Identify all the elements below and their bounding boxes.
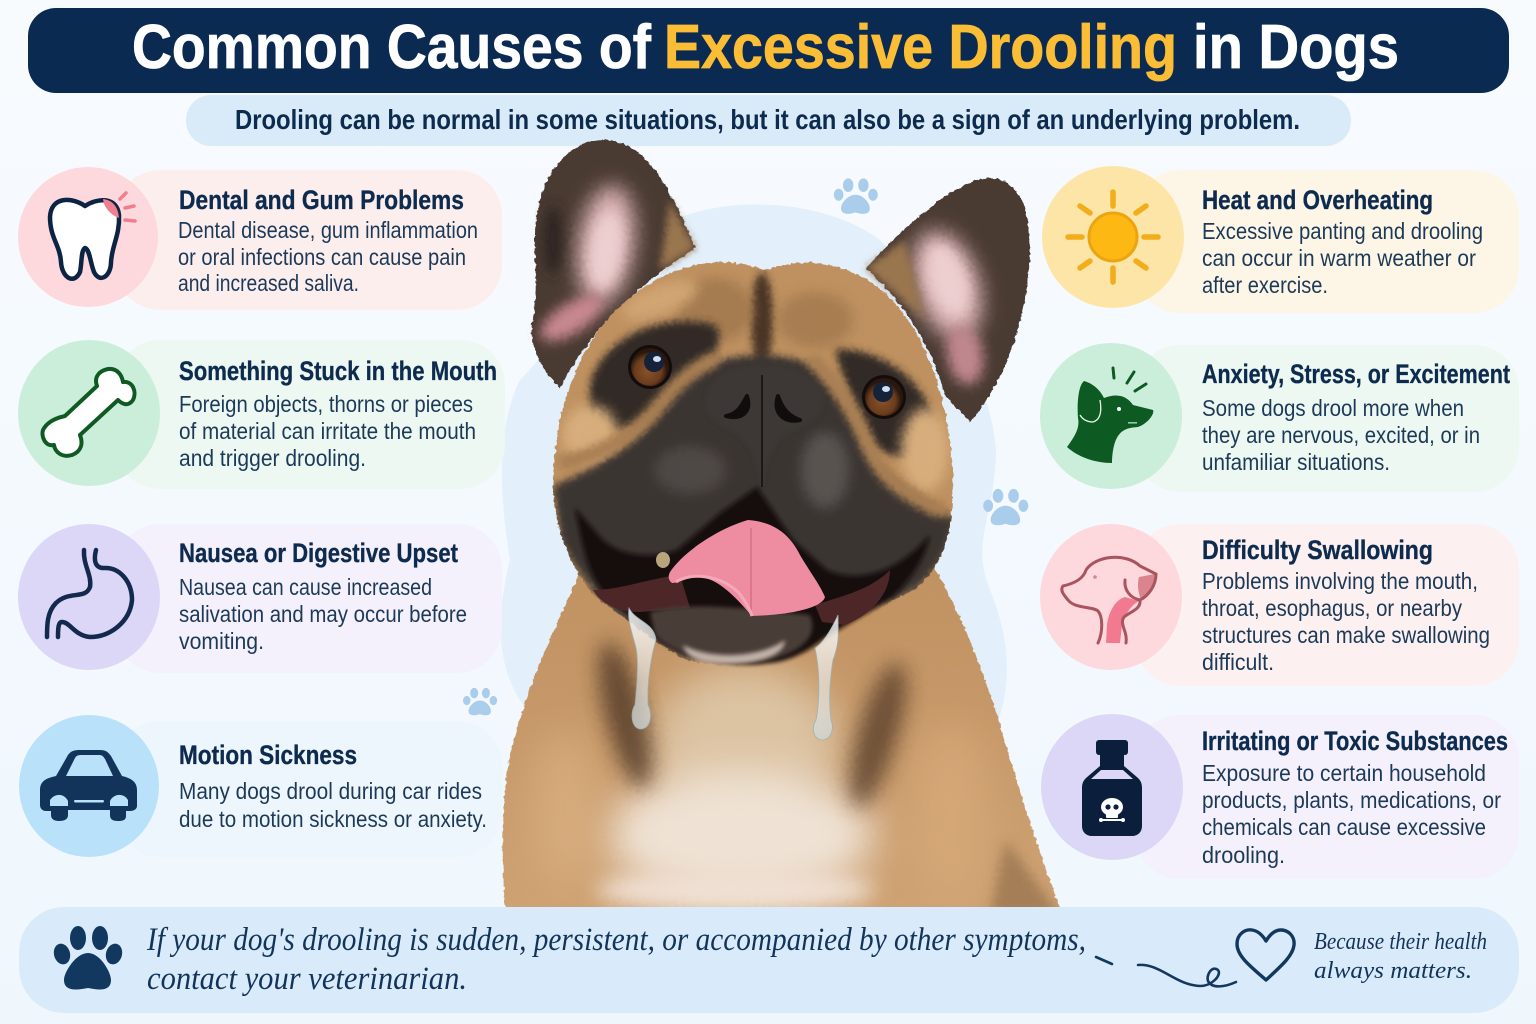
title text: highlight: Excessive Drooling xyxy=(664,13,1177,82)
dog illustration xyxy=(495,140,1075,930)
body text: Foreign objects, thorns or pieces xyxy=(179,391,473,417)
icon circle yellow xyxy=(1042,166,1184,308)
squiggle line xyxy=(1096,957,1236,986)
icon circle green xyxy=(1040,343,1182,489)
icon circle purple xyxy=(1041,714,1183,860)
heading: Something Stuck in the Mouth xyxy=(179,356,497,386)
body text: can occur in warm weather or xyxy=(1202,245,1476,271)
icon: bone xyxy=(42,369,135,456)
muzzle xyxy=(553,355,955,660)
body text: they are nervous, excited, or in xyxy=(1202,422,1480,448)
body text: Exposure to certain household xyxy=(1202,760,1486,786)
body text: Excessive panting and drooling xyxy=(1202,218,1483,244)
heading: Difficulty Swallowing xyxy=(1202,535,1433,565)
right ear xyxy=(866,178,1030,422)
body text xyxy=(1202,218,1483,298)
body text: structures can make swallowing xyxy=(1202,622,1490,648)
card: Difficulty Swallowing xyxy=(1040,524,1519,686)
body text: Dental disease, gum inflammation xyxy=(178,217,478,243)
card: Nausea or Digestive Upset xyxy=(18,524,502,673)
body text: Some dogs drool more when xyxy=(1202,395,1464,421)
right gum xyxy=(815,570,890,625)
body text xyxy=(179,391,476,471)
head and face xyxy=(545,250,965,680)
icon: sun xyxy=(1068,192,1158,282)
title text: white start: Common Causes of xyxy=(132,13,651,82)
decorative paw prints xyxy=(463,178,1028,715)
nose xyxy=(706,365,823,487)
heading: Motion Sickness xyxy=(179,740,357,770)
footer banner xyxy=(19,907,1519,1013)
footer message: If your dog's drooling is sudden, persistent, or accompanied by other symptoms, xyxy=(146,922,1086,958)
body text xyxy=(179,778,487,832)
drool drops xyxy=(629,608,838,740)
teeth xyxy=(656,552,670,568)
icon: paw xyxy=(52,926,124,990)
body text: Many dogs drool during car rides xyxy=(179,778,482,804)
icon circle green xyxy=(18,340,160,486)
title text: white end: in Dogs xyxy=(1193,13,1399,82)
card: Something Stuck in the Mouth xyxy=(18,340,505,489)
eye patches xyxy=(590,321,719,431)
card: Irritating or Toxic Substances xyxy=(1041,714,1519,879)
chin xyxy=(650,606,812,663)
body text: chemicals can cause excessive xyxy=(1202,814,1486,840)
card: Heat and Overheating xyxy=(1042,166,1519,313)
subtitle pill xyxy=(186,95,1351,146)
side note: Because their health xyxy=(1314,929,1487,955)
card: Anxiety, Stress, or Excitement xyxy=(1040,343,1519,492)
heading: Dental and Gum Problems xyxy=(179,185,464,215)
icon circle pink xyxy=(1040,524,1182,670)
tongue xyxy=(669,520,825,616)
card: Motion Sickness xyxy=(19,715,502,857)
body text: vomiting. xyxy=(179,628,264,654)
icon: heart xyxy=(1237,930,1294,980)
body text: unfamiliar situations. xyxy=(1202,449,1390,475)
icon: stomach xyxy=(47,550,132,637)
icon circle pink xyxy=(18,167,158,307)
icon: car xyxy=(40,750,137,821)
heading: Nausea or Digestive Upset xyxy=(179,538,458,568)
body text: products, plants, medications, or xyxy=(1202,787,1501,813)
side note xyxy=(1314,929,1487,984)
card: Dental and Gum Problems xyxy=(18,167,502,310)
icon circle purple xyxy=(18,524,160,670)
body text: or oral infections can cause pain xyxy=(178,244,466,270)
body text xyxy=(1202,760,1501,868)
body text: difficult. xyxy=(1202,649,1274,675)
side note: always matters. xyxy=(1314,958,1472,984)
footer message: contact your veterinarian. xyxy=(147,961,467,997)
body text: Problems involving the mouth, xyxy=(1202,568,1478,594)
subtitle pill: Drooling can be normal in some situations, but it can also be a sign of an underlying problem. xyxy=(235,104,1300,135)
body text: after exercise. xyxy=(1202,272,1328,298)
dog body xyxy=(501,567,1060,907)
body text: throat, esophagus, or nearby xyxy=(1202,595,1462,621)
wrinkle band xyxy=(565,360,940,510)
blue blob behind dog xyxy=(501,204,1007,740)
left ear xyxy=(532,140,696,388)
body text: of material can irritate the mouth xyxy=(179,418,476,444)
body text xyxy=(1202,568,1490,675)
body text: and increased saliva. xyxy=(178,270,359,296)
body text: salivation and may occur before xyxy=(179,601,467,627)
footer message xyxy=(146,922,1086,997)
chin white fur xyxy=(683,640,785,664)
body text xyxy=(178,217,478,296)
heading: Heat and Overheating xyxy=(1202,185,1433,215)
body text: due to motion sickness or anxiety. xyxy=(179,806,487,832)
mouth base and lower jaw xyxy=(575,487,930,664)
title bar xyxy=(28,8,1509,93)
left gum xyxy=(593,575,690,612)
body text: and trigger drooling. xyxy=(179,445,366,471)
body text: Nausea can cause increased xyxy=(179,574,432,600)
body text: drooling. xyxy=(1202,842,1285,868)
icon: dog throat xyxy=(1062,557,1156,643)
icon: poison bottle xyxy=(1082,740,1142,836)
body text xyxy=(1202,395,1480,475)
eyes xyxy=(628,345,906,419)
icon circle blue xyxy=(19,715,159,857)
muzzle highlights xyxy=(801,432,849,508)
body text xyxy=(179,574,467,654)
open mouth xyxy=(575,487,930,664)
icon: dog head xyxy=(1067,368,1153,463)
icon: tooth xyxy=(50,193,135,279)
